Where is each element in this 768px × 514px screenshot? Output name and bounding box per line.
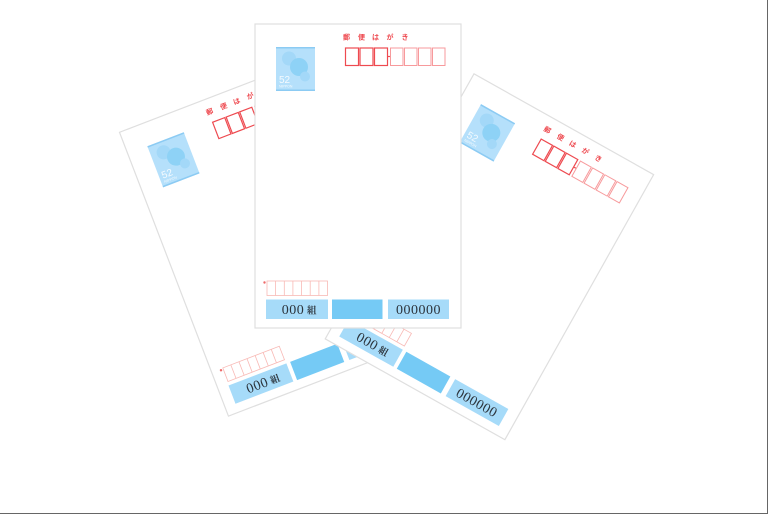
lottery number panels: 000 <box>282 303 304 318</box>
postal code boxes <box>213 87 312 139</box>
card paper <box>255 24 461 328</box>
stamp: 52 <box>465 130 480 145</box>
sender postal code boxes <box>219 346 284 383</box>
postcard title: は <box>232 97 242 107</box>
postcard title: が <box>245 91 255 102</box>
lottery number panels: 000000 <box>351 326 399 356</box>
postcard title: が <box>580 146 591 157</box>
postcard title <box>343 32 408 42</box>
stamp: NIPPON <box>279 84 293 88</box>
postal code boxes <box>533 139 628 203</box>
stamp: 52 <box>279 75 291 86</box>
lottery number panels: 000 <box>244 375 271 397</box>
postcard title: 便 <box>555 132 566 143</box>
lottery number panels: 000000 <box>453 386 500 421</box>
postal code boxes <box>346 48 445 66</box>
postcard: centre, upright <box>255 24 461 328</box>
postcard title: 郵 <box>343 32 350 42</box>
lottery number panels: 組 <box>376 344 391 359</box>
lottery number panels: 組 <box>269 372 282 387</box>
stamp <box>460 104 515 162</box>
postcard title <box>205 85 269 117</box>
sender postal code boxes <box>348 302 411 346</box>
postcard title: 郵 <box>205 106 214 117</box>
postcard title: 便 <box>219 101 228 112</box>
postcard: right, rotated <box>325 74 654 440</box>
card paper <box>120 58 421 416</box>
postcard title: は <box>372 34 379 42</box>
lottery number panels <box>339 319 508 426</box>
postcard title: が <box>386 32 394 42</box>
stamp <box>147 132 200 187</box>
stamp: 52 <box>160 167 175 182</box>
stamp: NIPPON <box>463 138 477 149</box>
postcard: left, rotated <box>120 58 421 416</box>
card paper <box>325 74 654 440</box>
lottery number panels <box>228 320 406 404</box>
stamp: NIPPON <box>164 175 178 184</box>
lottery number panels <box>266 300 449 319</box>
postcard title: き <box>593 154 603 164</box>
lottery number panels: 組 <box>307 304 317 316</box>
postcard title: 便 <box>358 32 365 42</box>
postcard title: き <box>260 86 269 96</box>
postcard title: 郵 <box>542 124 553 136</box>
lottery number panels: 000000 <box>396 303 441 318</box>
postcard title: き <box>402 34 408 42</box>
sender postal code boxes <box>263 281 328 296</box>
stamp <box>276 47 315 91</box>
postcard title <box>542 124 604 164</box>
postcard title: は <box>567 139 577 150</box>
lottery number panels: 000 <box>353 330 380 354</box>
